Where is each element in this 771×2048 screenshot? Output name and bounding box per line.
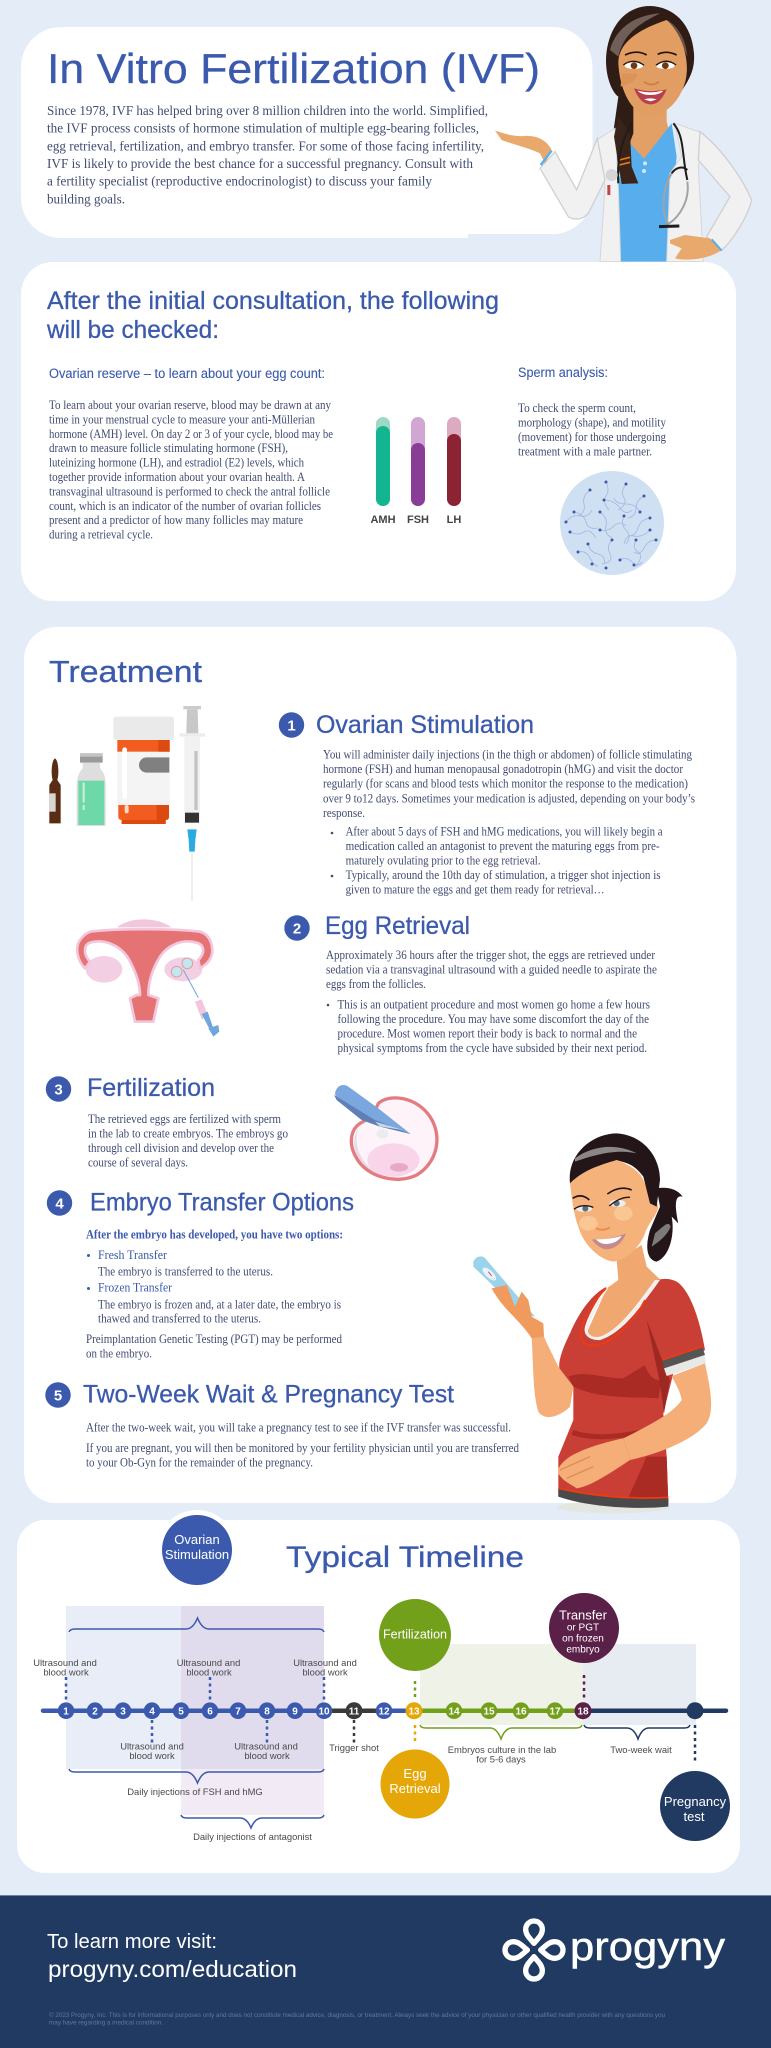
text: ovarian reserve: present and a predictor of how many follicles may mature bbox=[49, 513, 303, 527]
bullets: given to mature the eggs and get them ready for retrieval… bbox=[346, 883, 605, 897]
number badge 4: 4 bbox=[55, 1196, 64, 1212]
callout: pregnancy test: Pregnancy bbox=[664, 1794, 727, 1809]
timeline day nodes: 14 bbox=[448, 1706, 460, 1717]
illustration: woman holding pregnancy test bbox=[473, 1133, 711, 1513]
bullets: medication called an antagonist to prevent the maturing eggs from pre- bbox=[346, 839, 660, 853]
text: ovarian reserve: luteinizing hormone (LH), and estradiol (E2) levels, which bbox=[49, 456, 304, 470]
bullet: following the procedure. You may have some discomfort the day of the bbox=[338, 1012, 649, 1026]
title: In Vitro Fertilization (IVF) bbox=[47, 45, 540, 92]
timeline day nodes: 15 bbox=[483, 1706, 495, 1717]
callout: transfer: embryo bbox=[566, 1644, 600, 1656]
number badge 3: 3 bbox=[54, 1082, 63, 1098]
body text and options: The embryo is frozen and, at a later date, the embryo is bbox=[98, 1297, 341, 1311]
body text: You will administer daily injections (in the thigh or abdomen) of follicle stimulating bbox=[323, 748, 692, 762]
illustration: medications and syringe bbox=[49, 706, 205, 901]
shaded period: two-week wait bbox=[583, 1644, 696, 1725]
text: ovarian reserve: together provide information about your ovarian health. A bbox=[49, 470, 305, 484]
heading: Fertilization bbox=[87, 1074, 215, 1102]
number badge 1 bbox=[279, 712, 304, 738]
heading bbox=[46, 287, 499, 344]
body text and options: Preimplantation Genetic Testing (PGT) may be performed bbox=[86, 1332, 342, 1346]
timeline day nodes: 7 bbox=[235, 1706, 241, 1717]
text: ovarian reserve: transvaginal ultrasound is performed to check the antral follicle bbox=[49, 484, 330, 498]
timeline labels: Daily injections of antagonist bbox=[193, 1831, 312, 1842]
chart: hormone bars: FSH bbox=[407, 514, 429, 526]
body text bbox=[86, 1421, 519, 1470]
callout: ovarian stimulation: Ovarian bbox=[174, 1532, 220, 1547]
heading: will be checked: bbox=[46, 316, 219, 344]
intro text block: egg retrieval, fertilization, and embryo transfer. For some of those facing infertility, bbox=[47, 138, 484, 153]
heading: Egg Retrieval bbox=[325, 912, 470, 940]
timeline labels: blood work bbox=[186, 1666, 232, 1678]
step 5: two-week wait and pregnancy test bbox=[45, 1381, 519, 1470]
timeline day nodes: 5 bbox=[178, 1706, 184, 1717]
body text and options: The embryo is transferred to the uterus. bbox=[98, 1265, 273, 1279]
body text and options: thawed and transferred to the uterus. bbox=[98, 1312, 261, 1326]
timeline labels: Ultrasound and bbox=[234, 1740, 298, 1752]
body text: in the lab to create embryos. The embroys go bbox=[88, 1126, 288, 1140]
timeline day nodes: 11 bbox=[349, 1706, 360, 1717]
timeline labels: blood work bbox=[302, 1666, 348, 1678]
timeline labels: for 5-6 days bbox=[476, 1754, 526, 1764]
timeline labels: Two-week wait bbox=[610, 1744, 672, 1755]
timeline labels: blood work bbox=[244, 1750, 290, 1761]
callout: egg retrieval: Retrieval bbox=[389, 1781, 441, 1796]
number badge 4 bbox=[47, 1190, 72, 1216]
timeline day nodes bbox=[58, 1702, 703, 1719]
shaded period: embryo culture bbox=[420, 1644, 583, 1725]
bullet: physical symptoms from the cycle have subsided by their next period. bbox=[338, 1041, 647, 1055]
timeline labels: Trigger shot bbox=[329, 1742, 379, 1753]
shaded period: antagonist overlap bbox=[181, 1606, 324, 1815]
bullets: maturely ovulating prior to the egg retrieval. bbox=[346, 854, 541, 868]
step 1: ovarian stimulation bbox=[279, 711, 695, 897]
callout: pregnancy test bbox=[660, 1771, 730, 1841]
subheading: sperm analysis: Sperm analysis: bbox=[518, 365, 608, 380]
text: ovarian reserve: To learn about your ovarian reserve, blood may be drawn at any bbox=[49, 398, 332, 412]
body text: After the two-week wait, you will take a pregnancy test to see if the IVF transfer was successful. bbox=[86, 1421, 511, 1435]
callout: transfer bbox=[549, 1593, 619, 1663]
intro text block: the IVF process consists of hormone stimulation of multiple egg-bearing follicles, bbox=[47, 121, 479, 136]
text: ovarian reserve: drawn to measure follicle stimulating hormone (FSH), bbox=[49, 441, 288, 455]
body text: over 9 to12 days. Sometimes your medication is adjusted, depending on your body’s bbox=[323, 791, 695, 805]
dotted connectors bbox=[66, 1675, 695, 1761]
legal disclaimer bbox=[49, 2011, 665, 2026]
timeline labels: Ultrasound and bbox=[177, 1657, 240, 1668]
intro text block: a fertility specialist (reproductive endocrinologist) to discuss your family bbox=[47, 174, 432, 189]
number badge 5: 5 bbox=[54, 1388, 62, 1404]
shaded period: FSH and hMG bbox=[66, 1606, 181, 1769]
timeline day nodes: 18 bbox=[577, 1706, 589, 1717]
panel: typical timeline bbox=[17, 1510, 740, 1873]
logo: progyny bbox=[505, 1921, 725, 1979]
step 4: embryo transfer options bbox=[47, 1189, 354, 1360]
body text: The retrieved eggs are fertilized with sperm bbox=[88, 1112, 281, 1126]
timeline day nodes: 1 bbox=[63, 1706, 69, 1717]
text: ovarian reserve: time in your menstrual cycle to measure your anti-Müllerian bbox=[49, 412, 315, 426]
timeline day nodes: 9 bbox=[292, 1706, 298, 1717]
text: ovarian reserve: count, which is an indicator of the number of ovarian follicles bbox=[49, 499, 321, 513]
body text: eggs from the follicles. bbox=[326, 977, 426, 991]
panel: treatment bbox=[24, 627, 736, 1503]
timeline day nodes: 10 bbox=[318, 1706, 330, 1717]
panel: introduction bbox=[21, 27, 592, 238]
number badge 2: 2 bbox=[293, 920, 301, 938]
bullets bbox=[331, 825, 663, 897]
number badge 2 bbox=[284, 915, 310, 941]
callout: egg retrieval: Egg bbox=[403, 1766, 427, 1781]
body text and options bbox=[86, 1228, 343, 1360]
legal disclaimer: may have regarding a medical condition. bbox=[49, 2020, 163, 2026]
body text: If you are pregnant, you will then be monitored by your fertility physician until you are transferred bbox=[86, 1441, 519, 1455]
timeline day nodes: 8 bbox=[264, 1706, 270, 1717]
timeline labels: blood work bbox=[129, 1750, 175, 1761]
logo: progyny: progyny bbox=[570, 1925, 725, 1969]
body text and options: on the embryo. bbox=[86, 1346, 152, 1360]
timeline day nodes: 3 bbox=[120, 1706, 126, 1717]
timeline labels: Daily injections of FSH and hMG bbox=[127, 1786, 263, 1797]
body text: course of several days. bbox=[88, 1156, 188, 1170]
chart: hormone bars: LH bbox=[447, 514, 461, 526]
call to action bbox=[47, 1931, 297, 1982]
bullets: Typically, around the 10th day of stimulation, a trigger shot injection is bbox=[346, 868, 661, 882]
chart: hormone bars: AMH bbox=[370, 514, 396, 526]
bullets: After about 5 days of FSH and hMG medications, you will likely begin a bbox=[346, 825, 663, 839]
text: ovarian reserve bbox=[49, 398, 333, 542]
timeline labels: Embryos culture in the lab bbox=[448, 1744, 556, 1755]
illustration: sperm under microscope bbox=[560, 471, 664, 575]
subheading: ovarian reserve: Ovarian reserve – to learn about your egg count: bbox=[49, 366, 325, 381]
body text and options: After the embryo has developed, you have two options: bbox=[86, 1228, 343, 1242]
brackets bbox=[69, 1618, 690, 1828]
body text: to your Ob-Gyn for the remainder of the pregnancy. bbox=[86, 1456, 313, 1470]
call to action: To learn more visit: bbox=[47, 1931, 217, 1953]
callout: ovarian stimulation bbox=[157, 1510, 237, 1590]
illustration: uterus and ovaries with needle bbox=[77, 919, 219, 1037]
body text: response. bbox=[323, 806, 365, 820]
heading: treatment: Treatment bbox=[49, 654, 202, 689]
bullet: procedure. Most women report their body is back to normal and the bbox=[338, 1026, 637, 1040]
text: sperm analysis: (movement) for those undergoing bbox=[518, 430, 666, 444]
timeline day nodes: 6 bbox=[207, 1706, 213, 1717]
callout: transfer: on frozen bbox=[562, 1634, 604, 1644]
text: ovarian reserve: hormone (AMH) level. On day 2 or 3 of your cycle, blood may be bbox=[49, 427, 333, 441]
timeline labels: Ultrasound and bbox=[293, 1657, 357, 1668]
body text: regularly (for scans and blood tests which monitor the response to the medication) bbox=[323, 777, 688, 791]
timeline day nodes: 4 bbox=[149, 1706, 155, 1717]
timeline labels: Ultrasound and bbox=[33, 1657, 97, 1668]
body text: hormone (FSH) and human menopausal gonadotropin (hMG) and visit the doctor bbox=[323, 762, 683, 776]
text: sperm analysis bbox=[518, 401, 667, 458]
timeline day nodes: 12 bbox=[378, 1706, 390, 1717]
heading: Ovarian Stimulation bbox=[316, 711, 534, 739]
call to action: progyny.com/education bbox=[48, 1956, 297, 1982]
callout: fertilization: Fertilization bbox=[383, 1628, 447, 1642]
body text bbox=[88, 1112, 288, 1170]
bullet: This is an outpatient procedure and most women go home a few hours bbox=[338, 998, 650, 1012]
timeline day nodes: 2 bbox=[92, 1706, 98, 1717]
callout: pregnancy test: test bbox=[684, 1809, 705, 1824]
step 3: fertilization bbox=[46, 1074, 288, 1170]
timeline track bbox=[43, 1708, 726, 1713]
heading: Two-Week Wait & Pregnancy Test bbox=[83, 1381, 454, 1409]
body text and options: Fresh Transfer bbox=[98, 1248, 167, 1262]
bullet bbox=[327, 998, 650, 1055]
body text: Approximately 36 hours after the trigger shot, the eggs are retrieved under bbox=[326, 948, 655, 962]
intro text block: IVF is likely to provide the best chance for a successful pregnancy. Consult with bbox=[47, 156, 473, 171]
number badge 3 bbox=[46, 1076, 71, 1102]
intro text block: building goals. bbox=[47, 191, 125, 206]
callout: transfer: Transfer bbox=[559, 1608, 608, 1622]
body text bbox=[326, 948, 657, 991]
text: sperm analysis: treatment with a male partner. bbox=[518, 444, 652, 458]
timeline day nodes: 17 bbox=[549, 1706, 561, 1717]
body text and options: Frozen Transfer bbox=[98, 1281, 172, 1295]
timeline labels: Ultrasound and bbox=[120, 1740, 184, 1752]
callout: egg retrieval bbox=[380, 1750, 450, 1818]
text: sperm analysis: morphology (shape), and motility bbox=[518, 416, 667, 430]
intro text block: Since 1978, IVF has helped bring over 8 million children into the world. Simplified, bbox=[47, 103, 488, 118]
callout: fertilization bbox=[379, 1599, 451, 1671]
body text bbox=[323, 748, 695, 820]
footer bbox=[0, 1895, 771, 2048]
timeline day nodes: 13 bbox=[408, 1706, 420, 1717]
callout: ovarian stimulation: Stimulation bbox=[165, 1547, 229, 1562]
chart: hormone bars bbox=[370, 417, 461, 526]
illustration: smiling doctor bbox=[495, 6, 752, 262]
timeline labels bbox=[33, 1657, 672, 1842]
number badge 5 bbox=[45, 1382, 71, 1408]
panel: initial consultation checks bbox=[21, 262, 736, 601]
number badge 1: 1 bbox=[287, 718, 296, 734]
text: ovarian reserve: during a retrieval cycle. bbox=[49, 528, 153, 542]
text: sperm analysis: To check the sperm count, bbox=[518, 401, 636, 415]
timeline labels: blood work bbox=[43, 1666, 89, 1678]
heading: Embryo Transfer Options bbox=[90, 1189, 354, 1217]
timeline day nodes: 16 bbox=[515, 1706, 527, 1717]
illustration: egg fertilization with pipette bbox=[334, 1085, 437, 1179]
heading: typical timeline: Typical Timeline bbox=[286, 1541, 524, 1574]
step 2: egg retrieval bbox=[284, 912, 657, 1055]
heading: After the initial consultation, the following bbox=[47, 287, 499, 315]
body text: sedation via a transvaginal ultrasound with a guided needle to aspirate the bbox=[326, 963, 657, 977]
body text: through cell division and develop over the bbox=[88, 1141, 274, 1155]
intro text block bbox=[47, 103, 488, 206]
callout: transfer: or PGT bbox=[567, 1622, 599, 1634]
legal disclaimer: © 2023 Progyny, Inc. This is for informational purposes only and does not constitute medical advice, diagnosis, or treatment. Always seek the advice of your physician or other qualified health provider with any questions you bbox=[49, 2011, 665, 2019]
